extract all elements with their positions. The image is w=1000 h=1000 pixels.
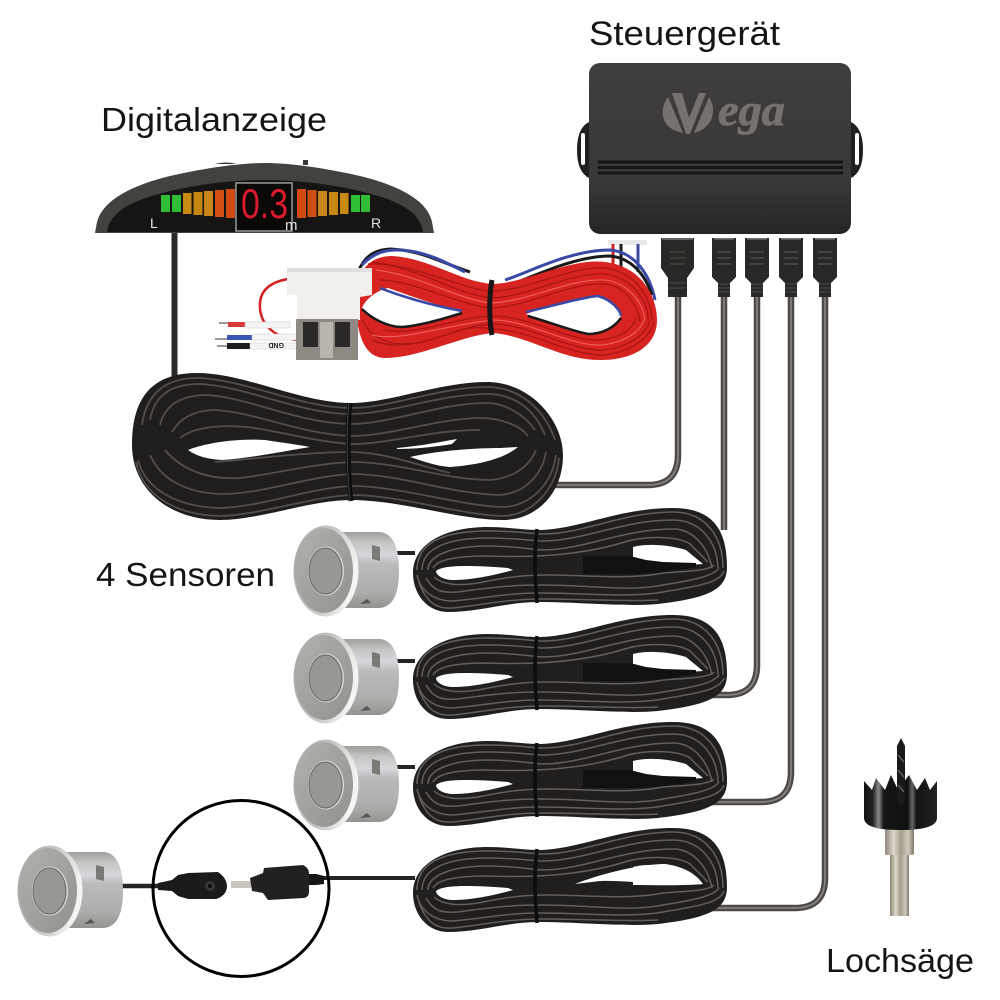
stripped leads [219,322,228,324]
fuse [296,319,358,360]
white connector and wires on control unit [608,240,647,272]
power cable coil [355,249,657,360]
connectors on control unit [661,238,837,297]
red loop wire [260,279,297,340]
digital display: L [150,215,158,231]
fuse holder and leads: GND [268,341,284,348]
housing [589,63,851,234]
blue and black wires [355,249,655,300]
title: Digitalanzeige: Digitalanzeige [101,101,327,138]
cable: display to coil [172,233,178,380]
title: Steuergerät: Steuergerät [589,15,781,53]
housing [95,163,434,233]
cables: control unit to coils [550,290,825,908]
white block [287,268,372,320]
sensor set 3 [294,722,727,830]
digital display [95,160,434,234]
sensor label: 4 Sensoren [96,556,275,593]
Vega logo [663,86,785,135]
red bundle [356,256,657,360]
male pin [231,881,251,888]
digital display: m [285,217,298,234]
sensor set 2 [294,615,727,724]
detail circle with plug connection [153,800,329,976]
female connector [158,872,227,899]
Vega logo: ega [718,86,785,135]
digital display: 0.3 [241,180,288,227]
readout [236,183,292,231]
level bars [161,189,370,218]
hole saw [864,738,937,916]
collar [885,828,914,855]
sensor set 1 [294,508,727,616]
control unit box [577,63,863,234]
label: Lochsäge: Lochsäge [826,942,974,979]
drill bit [897,738,905,806]
male connector [250,865,309,900]
cutter cup [864,775,937,830]
lower blue and black wires in the holes [362,288,621,334]
main black cable coil [132,373,563,520]
fuse holder and leads [215,268,372,360]
digital display: R [371,215,381,231]
shank [890,852,909,916]
sensor set 4 with extension cable [18,828,727,936]
mounting ears [577,122,863,178]
